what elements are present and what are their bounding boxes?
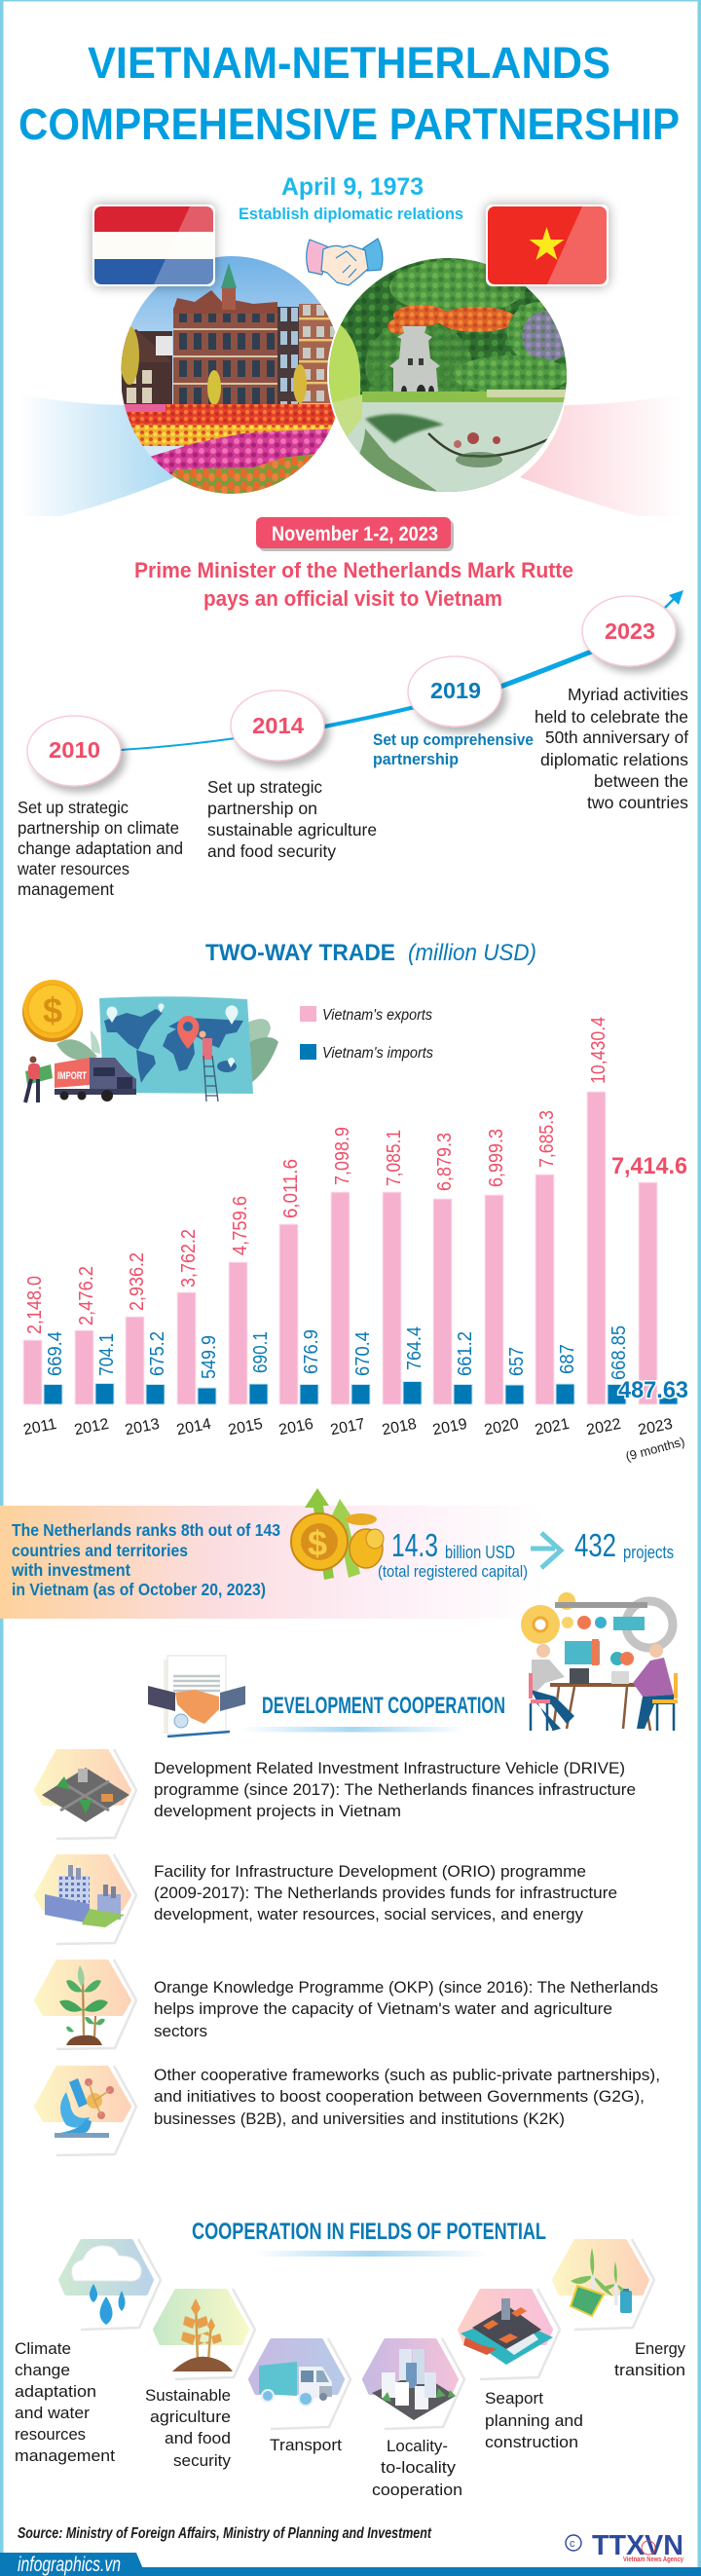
item text: sectors	[154, 2022, 207, 2040]
date heading: April 9, 1973: Establish diplomatic relations	[239, 205, 463, 223]
hexagon icon: seaport	[460, 2289, 560, 2379]
panel: investment band	[0, 1506, 545, 1619]
logo: TTXVN: TTXVN	[592, 2530, 683, 2561]
item text: and initiatives to boost cooperation between Governments (G2G),	[154, 2087, 645, 2106]
item: ORIO programme	[36, 1854, 617, 1944]
label: adaptation	[15, 2382, 96, 2401]
timeline text: 2023: between the	[594, 771, 688, 791]
label: cooperation	[372, 2481, 462, 2499]
exports values: 6,011.6	[280, 1159, 302, 1218]
label: Transport	[270, 2436, 342, 2454]
timeline node: 2014	[231, 691, 324, 761]
stat: registered capital: 14.3	[391, 1527, 438, 1563]
stat: registered capital: (total registered capital)	[378, 1562, 528, 1581]
timeline text: 2019	[373, 731, 534, 768]
year axis labels: 2021	[534, 1416, 571, 1438]
illustration: trade map, coin and truck: $	[43, 990, 62, 1030]
year axis labels: 2020	[483, 1416, 520, 1438]
imports values: 669.4	[45, 1331, 66, 1376]
item text: Development Related Investment Infrastructure Vehicle (DRIVE)	[154, 1759, 625, 1777]
logo: TTXVN: c	[570, 2538, 575, 2550]
item: Orange Knowledge Programme	[36, 1960, 658, 2049]
legend: Vietnam's exports	[322, 1007, 432, 1024]
hexagon icon: cloud and rain	[60, 2239, 161, 2330]
label	[614, 2339, 685, 2379]
field: locality-to-locality cooperation	[364, 2338, 464, 2499]
item text: development projects in Vietnam	[154, 1802, 401, 1820]
field: seaport	[460, 2289, 583, 2451]
legend	[300, 1006, 433, 1062]
timeline text: 2010: change adaptation and	[18, 839, 183, 858]
footer bar	[0, 2567, 701, 2576]
label: Climate	[15, 2339, 71, 2358]
item text: programme (since 2017): The Netherlands finances infrastructure	[154, 1780, 636, 1799]
heading: two-way trade: (million USD)	[408, 940, 536, 966]
label: security	[173, 2451, 231, 2470]
date heading: April 9, 1973: April 9, 1973	[281, 173, 424, 201]
footer tab: infographics.vn: infographics.vn	[18, 2554, 121, 2576]
label: and food	[165, 2429, 231, 2447]
imports bars	[44, 1381, 678, 1404]
timeline text: 2023	[535, 685, 688, 812]
flag: Netherlands	[92, 205, 215, 286]
year axis labels: 2016	[277, 1416, 314, 1438]
timeline node: 2019: 2019	[430, 678, 481, 703]
flag: Vietnam	[486, 205, 609, 286]
icon: handshake	[307, 239, 383, 285]
timeline text: 2014: and food security	[207, 841, 336, 861]
illustration: trade map, coin and truck	[22, 980, 278, 1102]
label: Seaport	[485, 2389, 543, 2408]
label: planning and	[485, 2411, 583, 2430]
imports values: 690.1	[250, 1331, 272, 1373]
exports values: 3,762.2	[178, 1229, 200, 1288]
imports values: 687	[557, 1344, 578, 1374]
label: management	[15, 2446, 115, 2465]
field: transport	[250, 2338, 350, 2454]
timeline text: 2023: 50th anniversary of	[545, 728, 688, 747]
timeline text: 2023: diplomatic relations	[540, 750, 688, 769]
timeline node: 2023	[582, 596, 676, 666]
label: transition	[614, 2361, 685, 2379]
icon: coins and rising arrows: $	[308, 1523, 327, 1563]
item text	[154, 2066, 660, 2128]
investment ranking text	[11, 1520, 280, 1599]
label	[485, 2389, 583, 2451]
timeline node: 2019	[408, 656, 501, 727]
exports bars	[23, 1092, 657, 1404]
investment ranking text: countries and territories	[12, 1541, 188, 1560]
exports values: 4,759.6	[230, 1196, 251, 1255]
imports values: 675.2	[147, 1331, 168, 1376]
logo: TTXVN: Vietnam News Agency	[623, 2555, 684, 2563]
exports values: 2,476.2	[76, 1266, 97, 1325]
imports values: 704.1	[96, 1333, 118, 1376]
heading: cooperation in fields of potential: COOPERATION IN FIELDS OF POTENTIAL	[192, 2219, 546, 2245]
timeline text: 2019: Set up comprehensive	[373, 731, 534, 749]
year axis labels: 2023	[637, 1416, 674, 1438]
investment ranking text: with investment	[11, 1560, 130, 1580]
imports values: 764.4	[404, 1326, 425, 1370]
imports values	[45, 1325, 630, 1380]
exports values: 6,879.3	[434, 1133, 456, 1191]
imports values: 670.4	[352, 1331, 374, 1376]
label: to-locality	[381, 2458, 457, 2477]
heading: two-way trade: TWO-WAY TRADE	[205, 940, 395, 966]
2023 values	[611, 1153, 688, 1403]
imports values: 668.85	[609, 1325, 630, 1380]
badge: November 1-2, 2023: November 1-2, 2023	[272, 523, 438, 545]
item text: development, water resources, social services, and energy	[154, 1905, 583, 1923]
arrow: capital to projects	[531, 1533, 561, 1568]
item text: helps improve the capacity of Vietnam's water and agriculture	[154, 1999, 612, 2018]
label: construction	[485, 2433, 578, 2451]
label	[145, 2386, 231, 2470]
year axis labels: 2017	[329, 1416, 366, 1438]
heading underline	[241, 1727, 465, 1732]
label: Sustainable	[145, 2386, 231, 2405]
2023 values: 7,414.6	[611, 1153, 687, 1179]
timeline text: 2010	[17, 798, 183, 899]
heading: two-way trade	[205, 940, 536, 966]
hexagon icon: factory	[36, 1854, 136, 1944]
exports values: 2,936.2	[127, 1252, 148, 1311]
exports values: 10,430.4	[588, 1017, 609, 1084]
item text	[154, 1759, 636, 1820]
timeline text: 2010: management	[18, 879, 114, 899]
hexagon icon: microscope	[36, 2066, 136, 2155]
label: agriculture	[150, 2408, 231, 2426]
label: and water	[15, 2404, 90, 2422]
timeline text: 2014	[207, 777, 377, 861]
imports values: 661.2	[455, 1331, 476, 1376]
stat: registered capital	[378, 1527, 528, 1581]
year axis labels: 2011	[22, 1416, 58, 1438]
timeline text: 2010: partnership on climate	[18, 818, 179, 838]
stat: projects: projects	[623, 1543, 674, 1562]
frame: right edge	[697, 0, 701, 2576]
label: Energy	[635, 2339, 685, 2358]
title	[18, 38, 680, 149]
hexagon icon: city	[36, 1749, 136, 1839]
badge: November 1-2, 2023	[256, 517, 454, 551]
imports values: 657	[506, 1347, 528, 1376]
timeline text: 2014: Set up strategic	[207, 777, 322, 797]
label: resources	[15, 2425, 86, 2444]
decorative fade: blue	[19, 394, 175, 516]
stat: projects	[574, 1527, 674, 1563]
exports values: 7,685.3	[536, 1110, 558, 1168]
year axis labels: 2015	[227, 1416, 264, 1438]
year axis labels: 2014	[175, 1416, 212, 1438]
hexagon icon: wheat	[155, 2289, 255, 2379]
year axis labels	[22, 1416, 686, 1464]
field: sustainable agriculture	[145, 2289, 255, 2470]
icon: coins and rising arrows	[291, 1488, 384, 1580]
field: climate change	[15, 2239, 161, 2465]
timeline text: 2010: Set up strategic	[18, 798, 129, 817]
stat: registered capital: billion USD	[445, 1543, 515, 1562]
heading: official visit: Prime Minister of the Netherlands Mark Rutte	[134, 558, 573, 582]
source: Source: Ministry of Foreign Affairs, Ministry of Planning and Investment	[18, 2525, 432, 2542]
photo: Netherlands street and tulips	[117, 253, 347, 497]
year axis labels: (9 months)	[624, 1434, 686, 1464]
exports values: 7,098.9	[332, 1127, 353, 1185]
stat: projects: 432	[574, 1527, 616, 1563]
2023 values: 487.63	[618, 1377, 688, 1403]
item text: (2009-2017): The Netherlands provides funds for infrastructure	[154, 1884, 617, 1902]
legend: Vietnam's imports	[322, 1045, 433, 1062]
timeline line and arrow	[121, 590, 683, 750]
label: change	[15, 2361, 70, 2379]
field: energy transition	[554, 2239, 685, 2379]
date heading: April 9, 1973	[239, 173, 463, 223]
exports values	[24, 1017, 609, 1334]
item text: businesses (B2B), and universities and institutions (K2K)	[154, 2109, 565, 2128]
item: other cooperative frameworks	[36, 2066, 660, 2155]
heading: development cooperation: DEVELOPMENT COOPERATION	[262, 1693, 505, 1719]
investment ranking text: The Netherlands ranks 8th out of 143	[12, 1520, 280, 1540]
illustration: team and charts	[521, 1592, 678, 1731]
timeline text: 2023: two countries	[587, 793, 688, 812]
hexagon icon: truck	[250, 2338, 350, 2429]
timeline text: 2019: partnership	[373, 751, 459, 768]
year axis labels: 2012	[73, 1416, 110, 1438]
title: VIETNAM-NETHERLANDS	[88, 38, 610, 88]
year axis labels: 2018	[381, 1416, 418, 1438]
photo: Hanoi Turtle Tower on Hoan Kiem lake	[326, 253, 573, 500]
imports values: 549.9	[199, 1335, 220, 1379]
frame: left edge	[0, 0, 4, 2576]
item text: Orange Knowledge Programme (OKP) (since 2016): The Netherlands	[154, 1978, 658, 1997]
label	[372, 2437, 462, 2499]
timeline node: 2010	[27, 716, 121, 786]
hexagon icon: wind and solar	[554, 2239, 654, 2330]
item text: Other cooperative frameworks (such as public-private partnerships),	[154, 2066, 660, 2084]
bar chart: exports and imports	[22, 1017, 688, 1464]
timeline text: 2010: water resources	[17, 859, 129, 878]
exports values: 6,999.3	[486, 1129, 507, 1187]
timeline node: 2014: 2014	[252, 713, 304, 738]
item: DRIVE programme	[36, 1749, 636, 1839]
hexagon icon: seedling	[36, 1960, 136, 2049]
hexagon icon: city towers	[364, 2338, 464, 2429]
item text: Facility for Infrastructure Development (ORIO) programme	[154, 1862, 586, 1881]
timeline text: 2014: sustainable agriculture	[207, 820, 377, 840]
icon: signed agreement handshake	[148, 1656, 245, 1736]
timeline node: 2023: 2023	[605, 618, 655, 644]
exports values: 7,085.1	[384, 1130, 405, 1186]
year axis labels: 2022	[585, 1416, 622, 1438]
timeline text: 2014: partnership on	[207, 799, 317, 818]
year axis labels: 2013	[124, 1416, 161, 1438]
exports values: 2,148.0	[24, 1276, 46, 1334]
timeline node: 2010: 2010	[49, 737, 100, 763]
investment ranking text: in Vietnam (as of October 20, 2023)	[12, 1580, 266, 1599]
year axis labels: 2019	[431, 1416, 468, 1438]
timeline text: 2023: held to celebrate the	[535, 707, 688, 727]
illustration: trade map, coin and truck: IMPORT	[57, 1070, 87, 1082]
decorative fade: pink	[520, 394, 682, 516]
heading: official visit: pays an official visit to Vietnam	[203, 586, 502, 611]
timeline text: 2023: Myriad activities	[568, 685, 688, 704]
label	[15, 2339, 115, 2465]
heading: official visit	[134, 558, 573, 611]
imports values: 676.9	[301, 1329, 322, 1374]
item text	[154, 1862, 617, 1923]
frame: top edge	[0, 0, 701, 2]
item text	[154, 1978, 658, 2040]
label: Locality-	[387, 2437, 448, 2455]
heading underline	[255, 2251, 487, 2257]
